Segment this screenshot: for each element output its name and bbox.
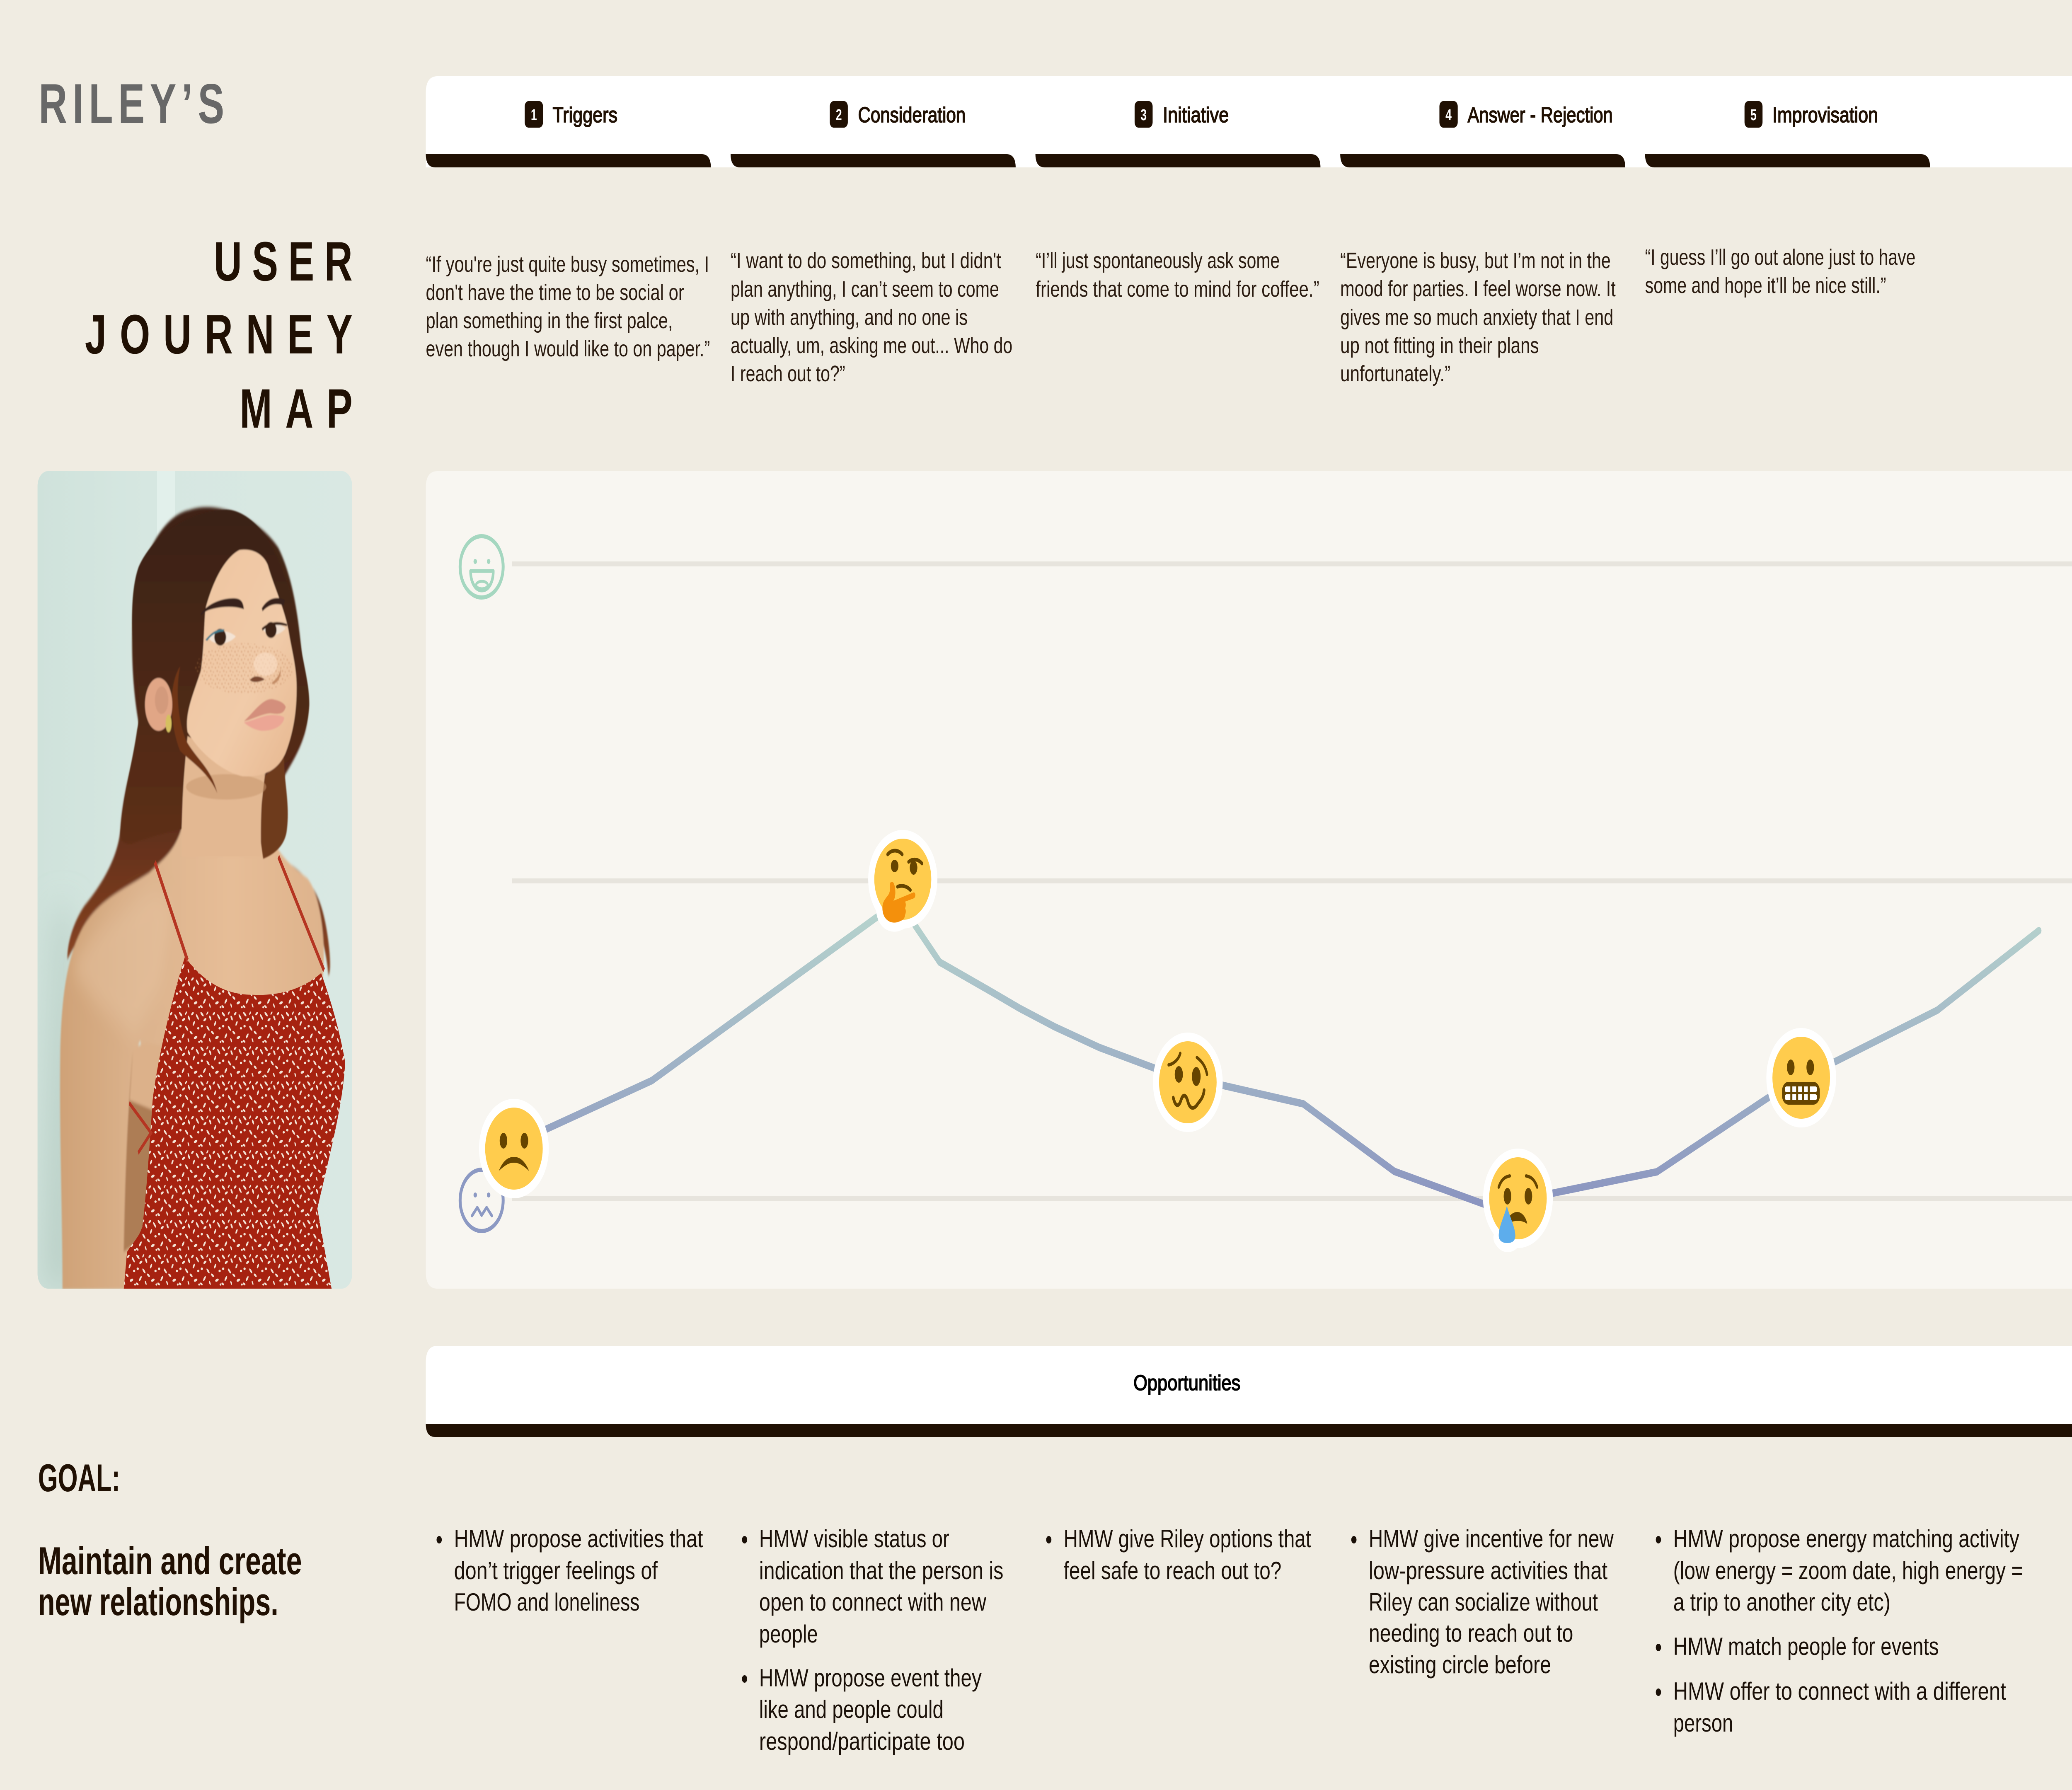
stage 3: initiative: 3 <box>1140 106 1147 123</box>
opportunities: triggers: don’t trigger feelings of <box>454 1557 658 1584</box>
stage 5: improvisation: Improvisation <box>1772 103 1878 127</box>
stage 2: consideration: 2 <box>836 106 842 123</box>
opportunities: answer - rejection: low-pressure activities that <box>1369 1557 1608 1584</box>
stage 1: triggers: 1 <box>531 106 537 123</box>
dress with floral print <box>123 856 345 1290</box>
opportunities: consideration: like and people could <box>759 1696 944 1723</box>
quote: improvisation: some and hope it’ll be nice still.” <box>1645 273 1886 298</box>
goal heading: GOAL: <box>38 1456 120 1500</box>
quote: triggers: plan something in the first palce, <box>426 308 673 333</box>
quote: consideration: “I want to do something, but I didn't <box>731 248 1001 273</box>
opportunities: answer - rejection <box>1351 1525 1614 1679</box>
quote: improvisation <box>1645 244 1915 298</box>
goal statement: Maintain and create <box>38 1539 302 1583</box>
emotion curve <box>515 901 2039 1210</box>
quote: answer - rejection: mood for parties. I feel worse now. It <box>1340 276 1616 301</box>
goal statement <box>38 1539 302 1624</box>
quote: consideration: I reach out to?” <box>731 361 845 386</box>
icon: sad face scale <box>460 1170 503 1231</box>
persona photo <box>38 471 352 1290</box>
stage 4: answer - rejection: 4 <box>1445 106 1452 123</box>
quote: improvisation: “I guess I’ll go out alone just to have <box>1645 244 1915 270</box>
opportunities: improvisation <box>1656 1525 2023 1737</box>
opportunities: improvisation: HMW propose energy matching activity <box>1673 1525 2019 1553</box>
quote: consideration: actually, um, asking me out... Who do <box>731 333 1012 358</box>
stage 5: improvisation: 5 <box>1750 106 1757 123</box>
opportunities: initiative: HMW give Riley options that <box>1064 1525 1311 1553</box>
stage 2: consideration: Consideration <box>858 103 966 127</box>
quote: consideration: up with anything, and no one is <box>731 305 968 330</box>
opportunities: triggers: HMW propose activities that <box>454 1525 703 1553</box>
header: opportunities: Opportunities <box>1133 1371 1240 1395</box>
persona name: RILEY’S <box>39 72 224 135</box>
quote: triggers: don't have the time to be social or <box>426 280 684 305</box>
opportunities: triggers <box>436 1525 703 1616</box>
emoji: frowning <box>479 1099 549 1198</box>
stage 5: improvisation <box>1645 101 1930 167</box>
emoji: crying <box>1483 1149 1553 1248</box>
opportunities: answer - rejection: existing circle before <box>1369 1651 1551 1679</box>
opportunities: consideration: people <box>759 1620 818 1648</box>
opportunities: initiative: feel safe to reach out to? <box>1064 1557 1281 1584</box>
header: journey stages <box>426 76 2072 167</box>
quote: answer - rejection: “Everyone is busy, but I’m not in the <box>1340 248 1611 273</box>
opportunities: improvisation: HMW offer to connect with a different <box>1673 1677 2006 1705</box>
opportunities: consideration: HMW propose event they <box>759 1664 982 1692</box>
opportunities: improvisation: HMW match people for events <box>1673 1633 1939 1660</box>
title: user journey map: JOURNEY <box>85 303 353 365</box>
stage 3: initiative: Initiative <box>1163 103 1229 127</box>
opportunities: answer - rejection: HMW give incentive for new <box>1369 1525 1614 1553</box>
quote: answer - rejection <box>1340 248 1616 386</box>
opportunities: consideration: indication that the person is <box>759 1557 1003 1584</box>
quote: initiative: “I’ll just spontaneously ask some <box>1036 248 1280 273</box>
goal statement: new relationships. <box>38 1580 278 1624</box>
emoji: thinking <box>868 830 937 929</box>
emoji: woozy <box>1153 1033 1223 1132</box>
emoji: grimacing <box>1766 1028 1836 1127</box>
panel: emotion chart <box>426 471 2072 1289</box>
head <box>121 510 309 859</box>
stage 3: initiative <box>1036 101 1320 167</box>
quote: initiative: friends that come to mind for coffee.” <box>1036 276 1319 302</box>
stage 2: consideration <box>731 101 1016 167</box>
quote: answer - rejection: up not fitting in their plans <box>1340 333 1539 358</box>
opportunities: consideration <box>742 1525 1003 1755</box>
title: user journey map <box>85 230 353 440</box>
quote: triggers <box>426 252 710 361</box>
quote: consideration <box>731 248 1012 386</box>
quote: answer - rejection: gives me so much anxiety that I end <box>1340 305 1613 330</box>
opportunities: consideration: open to connect with new <box>759 1588 987 1616</box>
header: opportunities <box>426 1346 2072 1437</box>
stage 4: answer - rejection <box>1340 101 1625 167</box>
stage 4: answer - rejection: Answer - Rejection <box>1468 103 1613 127</box>
stage 1: triggers: Triggers <box>553 103 617 127</box>
opportunities: initiative <box>1046 1525 1311 1584</box>
quote: triggers: even though I would like to on paper.” <box>426 336 710 361</box>
title: user journey map: USER <box>214 230 353 293</box>
icon: happy face scale <box>460 536 503 597</box>
opportunities: improvisation: person <box>1673 1709 1733 1737</box>
opportunities: improvisation: a trip to another city etc) <box>1673 1588 1890 1616</box>
opportunities: improvisation: (low energy = zoom date, high energy = <box>1673 1557 2023 1584</box>
opportunities: answer - rejection: needing to reach out to <box>1369 1619 1573 1647</box>
quote: triggers: “If you're just quite busy sometimes, I <box>426 252 709 277</box>
stage 1: triggers <box>426 101 711 167</box>
title: user journey map: MAP <box>240 377 353 440</box>
quote: initiative <box>1036 248 1319 302</box>
opportunities: consideration: respond/participate too <box>759 1727 965 1755</box>
quote: consideration: plan anything, I can’t seem to come <box>731 276 999 302</box>
opportunities: consideration: HMW visible status or <box>759 1525 949 1553</box>
opportunities: triggers: FOMO and loneliness <box>454 1588 639 1616</box>
quote: answer - rejection: unfortunately.” <box>1340 361 1450 386</box>
opportunities: answer - rejection: Riley can socialize without <box>1369 1588 1598 1616</box>
